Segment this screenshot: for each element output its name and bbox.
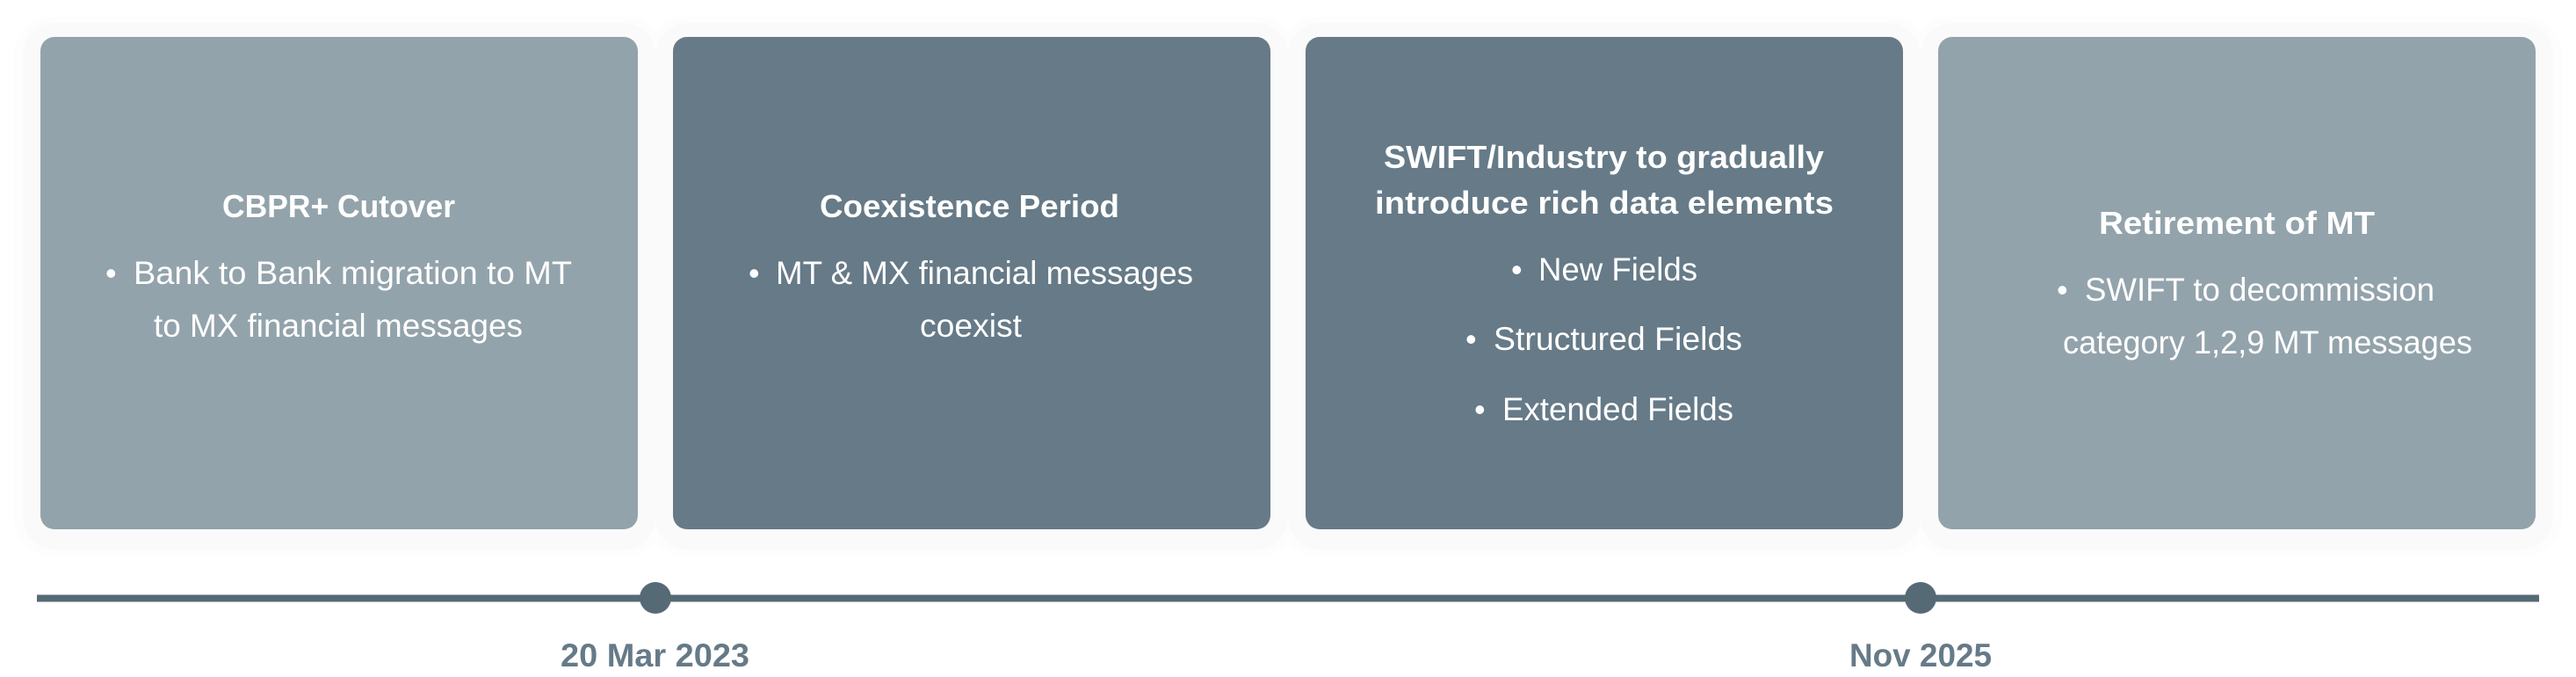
timeline line [37, 594, 2539, 601]
bullet text: New Fields: • [1511, 251, 1523, 288]
timeline [37, 582, 2539, 673]
bullet text: decommission: category 1,2,9 MT messages [2063, 324, 2472, 360]
heading: SWIFT/Industry to gradually introduce rich data elements: introduce rich data elements [1375, 185, 1834, 221]
bullet text: Structured Fields: • [1465, 321, 1477, 357]
bullet text: Extended Fields: Extended Fields [1502, 391, 1733, 427]
date label: 20 Mar 2023: 20 Mar 2023 [561, 637, 749, 673]
bullet text: bank migration: Bank to Bank migration to MT [134, 255, 572, 291]
heading: Coexistence Period: Coexistence Period [820, 188, 1119, 224]
bullet text: Structured Fields: Structured Fields [1494, 321, 1742, 357]
bullet text: bank migration: • [105, 255, 117, 291]
bullet text: decommission: SWIFT to decommission [2085, 272, 2435, 308]
heading: SWIFT/Industry to gradually introduce rich data elements: SWIFT/Industry to gradually [1384, 139, 1824, 175]
panel: SWIFT/Industry rich data elements [1306, 37, 1903, 529]
milestone marker: Nov 2025 [1905, 582, 1936, 614]
bullet text: coexistence: coexist [920, 308, 1023, 344]
bullet text: decommission: • [2057, 272, 2068, 308]
heading: CBPR+ Cutover: CBPR+ Cutover [222, 188, 455, 224]
panel: Coexistence Period [673, 37, 1270, 529]
milestone marker: 20 Mar 2023 [640, 582, 671, 614]
bullet text: coexistence [749, 255, 1193, 344]
heading: Retirement of MT: Retirement of MT [2099, 205, 2375, 241]
bullet text: coexistence: • [749, 255, 760, 291]
date label: Nov 2025: Nov 2025 [1849, 637, 1992, 673]
heading: SWIFT/Industry to gradually introduce rich data elements [1375, 139, 1834, 221]
bullet text: coexistence: MT & MX financial messages [776, 255, 1193, 291]
panel: CBPR+ Cutover [40, 37, 638, 529]
panel: Retirement of MT [1938, 37, 2536, 529]
bullet text: bank migration [105, 255, 572, 344]
bullet text: decommission [2057, 272, 2472, 360]
bullet text: bank migration: to MX financial messages [154, 308, 523, 344]
bullet text: Extended Fields: • [1474, 391, 1486, 427]
bullet text: New Fields: New Fields [1538, 251, 1697, 288]
